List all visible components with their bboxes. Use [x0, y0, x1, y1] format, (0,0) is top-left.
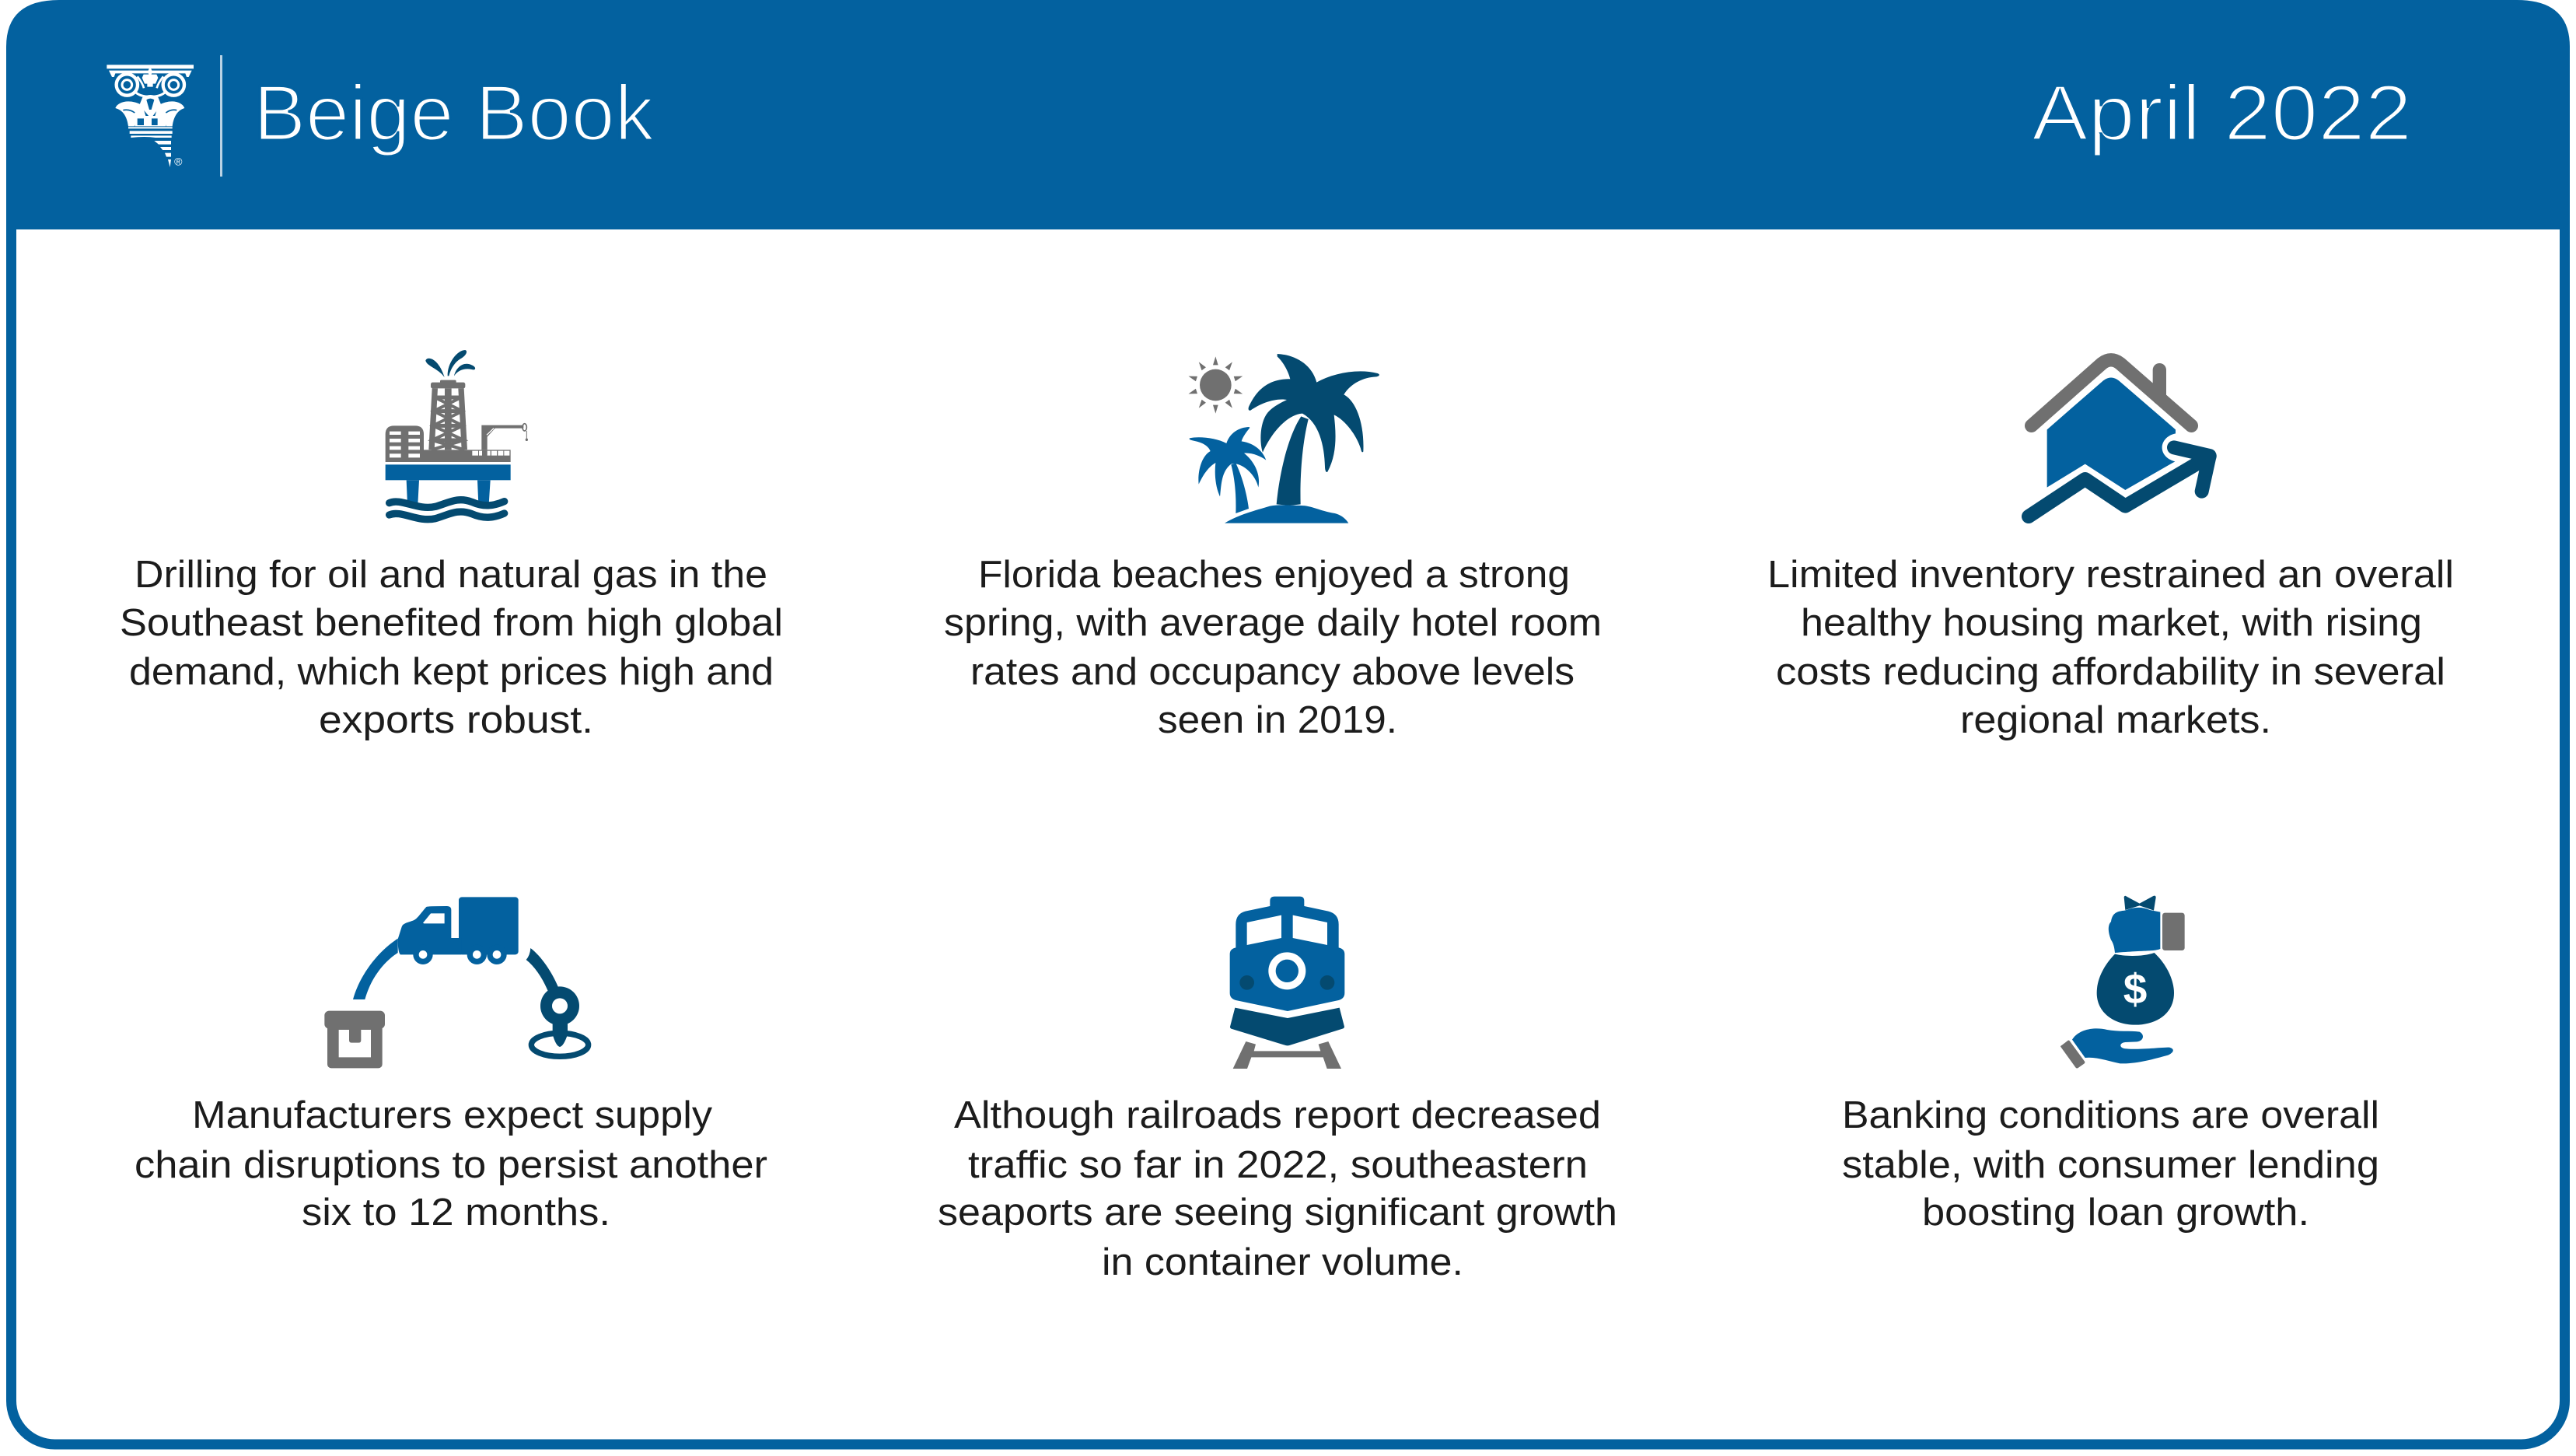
header band [6, 0, 2570, 229]
text: housing: regional markets. [1960, 699, 2271, 741]
text: banking: boosting loan growth. [1922, 1192, 2309, 1234]
text: railroads and seaports [938, 1094, 1617, 1283]
text: housing: costs reducing affordability in several [1776, 651, 2445, 693]
icon: palm trees and sun [1187, 354, 1379, 523]
text: supply chain: chain disruptions to persist another [135, 1144, 767, 1186]
text: railroads and seaports: traffic so far in 2022, southeastern [968, 1144, 1588, 1186]
text: railroads and seaports: seaports are seeing significant growth [938, 1192, 1617, 1234]
panel: supply chain [135, 897, 767, 1234]
text: Florida beaches [944, 554, 1602, 741]
text: housing: Limited inventory restrained an overall [1767, 554, 2454, 596]
icon: offshore oil rig [386, 350, 528, 520]
icon: locomotive [1230, 897, 1344, 1069]
text: supply chain: Manufacturers expect supply [192, 1094, 713, 1136]
panel: Florida beaches [944, 354, 1602, 741]
text: oil drilling [120, 554, 783, 741]
panel: oil drilling [120, 350, 783, 741]
date: April 2022 [2032, 70, 2412, 157]
panel: railroads and seaports [938, 897, 1617, 1283]
text: banking [1842, 1094, 2379, 1234]
icon: money bag and hand: $ [2123, 965, 2147, 1013]
logo: column [107, 65, 194, 168]
text: supply chain: six to 12 months. [302, 1192, 610, 1234]
title: Beige Book [253, 70, 654, 157]
icon: delivery truck route [324, 897, 589, 1068]
icon: money bag and hand [2060, 896, 2185, 1069]
text: housing: healthy housing market, with rising [1801, 602, 2422, 644]
text: oil drilling: demand, which kept prices high and [129, 651, 774, 693]
text: oil drilling: Drilling for oil and natural gas in the [135, 554, 767, 596]
panel: banking [1842, 896, 2379, 1234]
header divider [220, 55, 222, 177]
text: banking: Banking conditions are overall [1842, 1094, 2379, 1136]
text: banking: stable, with consumer lending [1842, 1144, 2379, 1186]
panel: housing [1767, 360, 2454, 741]
text: railroads and seaports: in container volume. [1102, 1241, 1463, 1283]
text: Florida beaches: spring, with average daily hotel room [944, 602, 1602, 644]
text: Florida beaches: Florida beaches enjoyed a strong [978, 554, 1570, 596]
text: oil drilling: exports robust. [319, 699, 593, 741]
icon: house with rising arrow [2029, 360, 2210, 516]
text: Florida beaches: rates and occupancy above levels [970, 651, 1575, 693]
text: railroads and seaports: Although railroads report decreased [954, 1094, 1601, 1136]
logo: column: ® [174, 156, 183, 168]
text: supply chain [135, 1094, 767, 1234]
text: oil drilling: Southeast benefited from high global [120, 602, 783, 644]
text: Florida beaches: seen in 2019. [1158, 699, 1397, 741]
text: housing [1767, 554, 2454, 741]
